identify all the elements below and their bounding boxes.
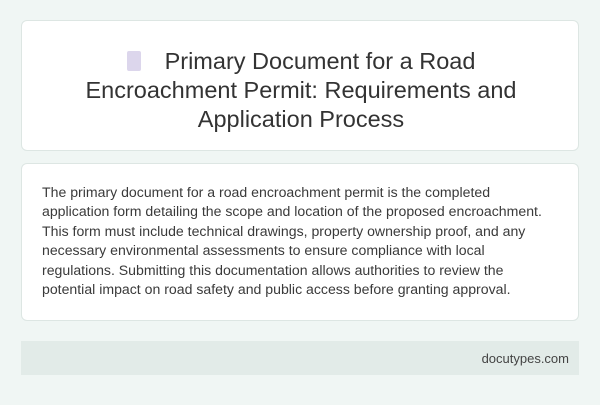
title: Application Process [198,106,404,132]
text block: The primary document for a road encroachment permit is the completed application form detailing the scope and location of the proposed encroachment. This form must include technical drawings, property ownership proof, and any necessary environmental assessments to ensure compliance with local regulations. Submitting this documentation allows authorities to review the potential impact on road safety and public access before granting approval. [42,184,542,297]
title: Primary Document for a Road [165,48,475,74]
title [85,48,517,132]
footer bar [21,341,579,375]
panel: title [21,20,579,151]
footer text: docutypes.com [482,351,569,366]
panel: description [21,163,579,321]
title: Encroachment Permit: Requirements and [85,77,517,103]
icon: document [127,51,141,71]
